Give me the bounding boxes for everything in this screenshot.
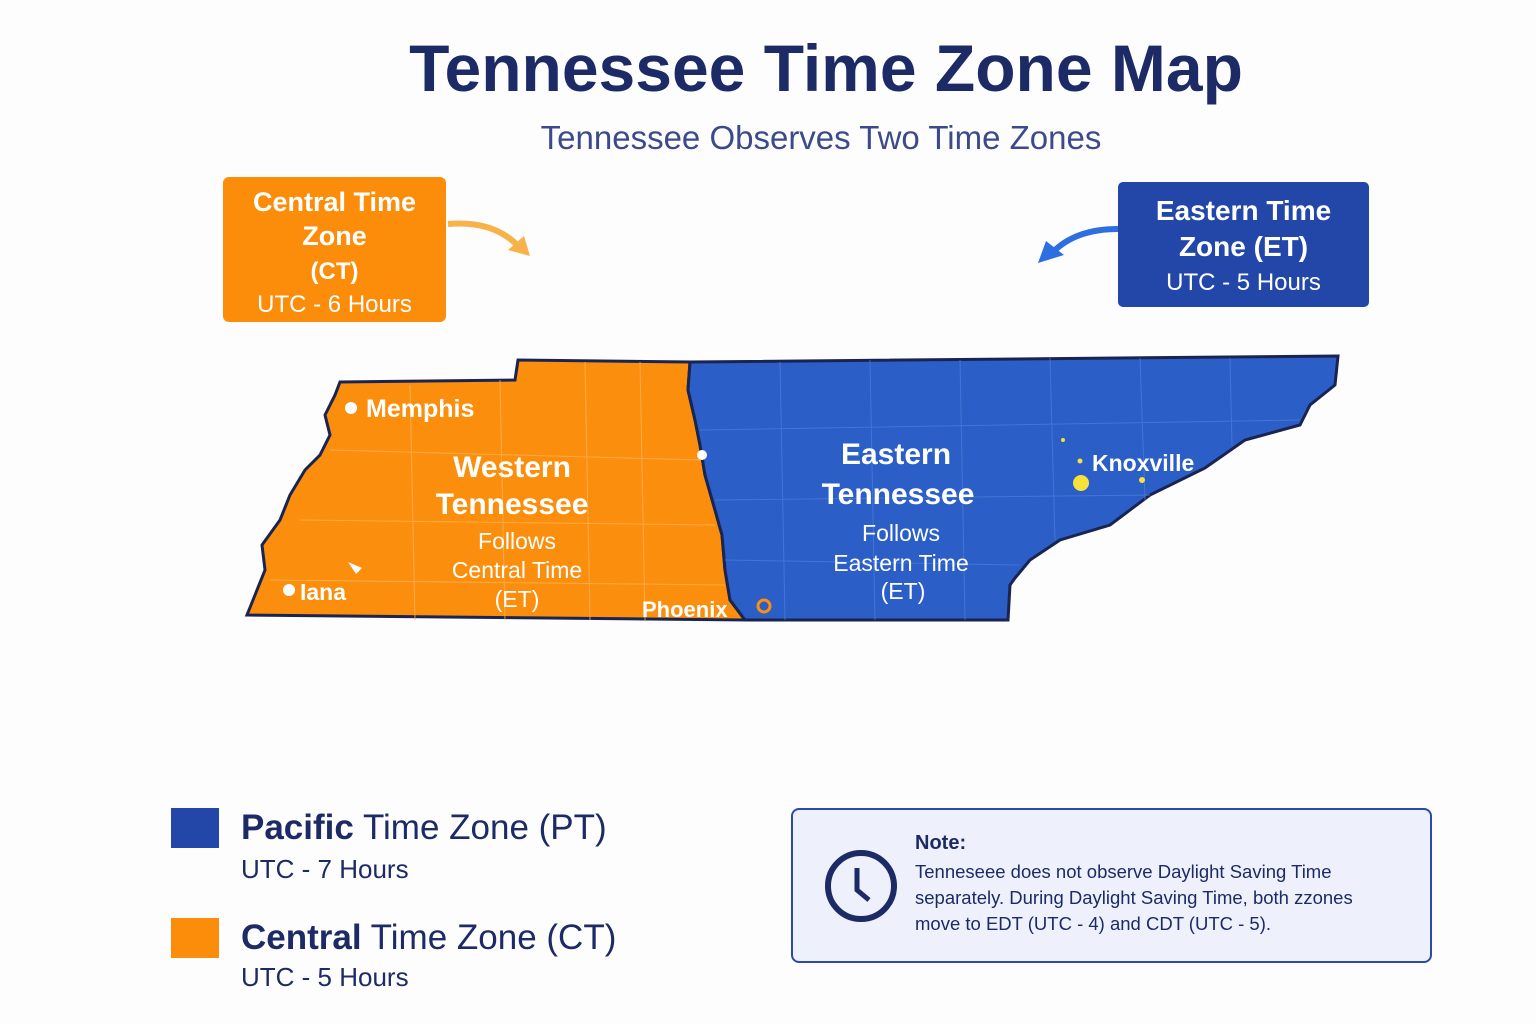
- label: eastern tennessee: Tennessee: [822, 478, 974, 511]
- city: phoenix: Phoenix: [642, 597, 728, 622]
- arrow: to western map: [448, 220, 530, 256]
- legend item: central: UTC - 5 Hours: [241, 962, 409, 992]
- note text: Tenneseee does not observe Daylight Saving Time: [915, 861, 1332, 882]
- label: western tennessee: Follows: [478, 528, 556, 554]
- region: western tennessee (central): [247, 360, 745, 620]
- callout: eastern time zone: UTC - 5 Hours: [1166, 269, 1321, 296]
- note text: separately. During Daylight Saving Time, both zzones: [915, 887, 1353, 908]
- callout: central time zone: Central Time: [253, 187, 416, 217]
- city: memphis: Memphis: [366, 395, 474, 423]
- label: eastern tennessee: Follows: [862, 520, 940, 546]
- label: western tennessee: Western: [453, 451, 571, 484]
- callout: central time zone: [223, 177, 446, 322]
- label: western tennessee: Tennessee: [436, 488, 588, 521]
- label: eastern tennessee: (ET): [881, 578, 925, 604]
- legend item: pacific: Pacific Time Zone (PT): [241, 808, 607, 847]
- callout: central time zone: (CT): [310, 258, 358, 285]
- legend item: pacific: [171, 808, 607, 884]
- city: iana: [283, 562, 362, 605]
- label: eastern tennessee: Eastern: [841, 438, 951, 471]
- note box: [791, 808, 1432, 963]
- note text: Note:: [915, 832, 966, 854]
- label: eastern tennessee: [822, 438, 974, 604]
- title: Tennessee Time Zone Map: [409, 31, 1243, 105]
- legend item: central: [171, 918, 616, 992]
- callout: central time zone: UTC - 6 Hours: [257, 291, 412, 318]
- city: phoenix: [642, 450, 770, 622]
- label: eastern tennessee: Eastern Time: [833, 550, 969, 576]
- note text: [915, 832, 1353, 934]
- subtitle: Tennessee Observes Two Time Zones: [541, 119, 1101, 156]
- arrow: to eastern map: [1038, 226, 1118, 263]
- note text: move to EDT (UTC - 4) and CDT (UTC - 5).: [915, 913, 1271, 934]
- callout: eastern time zone: [1118, 182, 1369, 307]
- city: knoxville: Knoxville: [1092, 450, 1194, 476]
- label: western tennessee: Central Time: [452, 557, 582, 583]
- city: iana: Iana: [300, 579, 346, 605]
- callout: central time zone: Zone: [302, 221, 367, 251]
- legend: [171, 808, 616, 992]
- region: eastern tennessee: [688, 356, 1338, 620]
- callout: eastern time zone: Zone (ET): [1179, 231, 1308, 262]
- legend item: central: Central Time Zone (CT): [241, 918, 616, 957]
- legend item: pacific: UTC - 7 Hours: [241, 854, 409, 884]
- icon: clock: [825, 850, 897, 922]
- label: western tennessee: [436, 451, 588, 612]
- callout: eastern time zone: Eastern Time: [1156, 195, 1331, 226]
- city: knoxville: [1061, 438, 1194, 491]
- label: western tennessee: (ET): [495, 586, 539, 612]
